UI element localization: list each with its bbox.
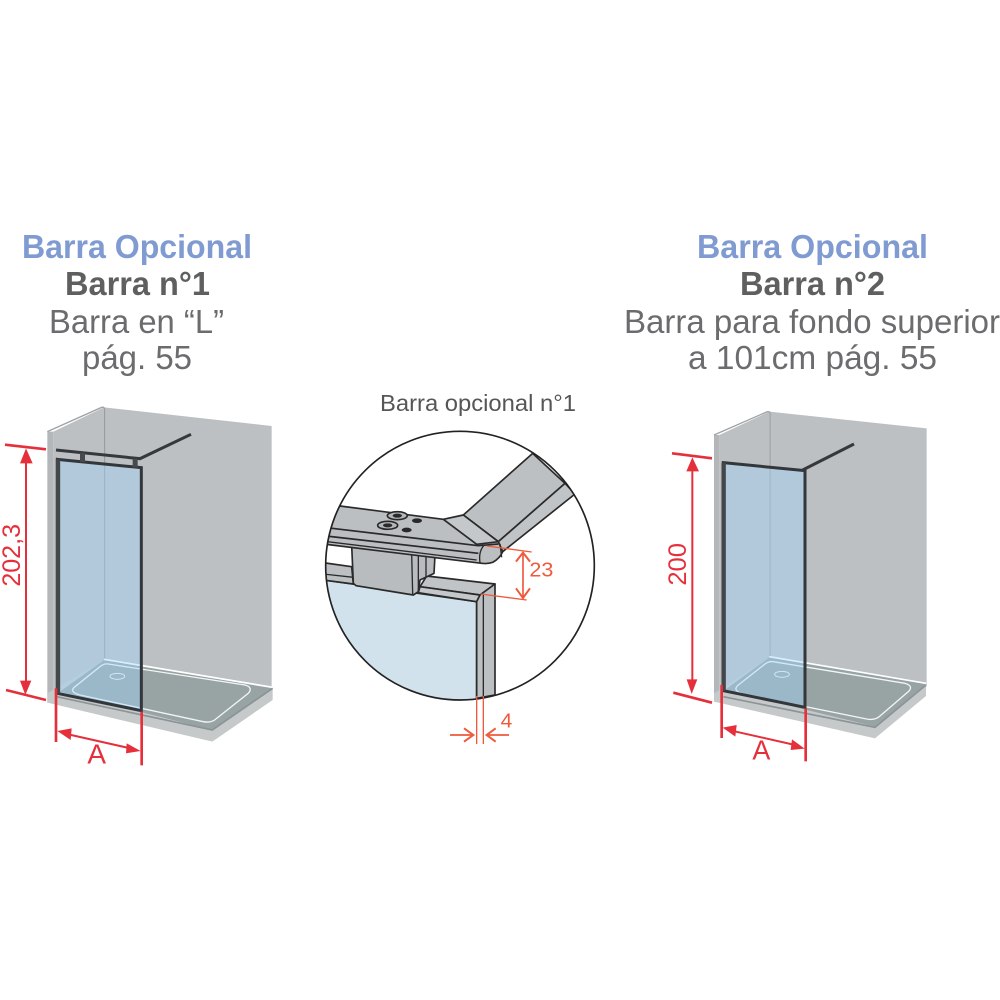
- dimension: 4: [450, 696, 512, 744]
- glass frame: [57, 459, 141, 711]
- heading: left column: Barra n°1: [65, 265, 210, 302]
- heading: right column: Barra Opcional: [697, 228, 928, 265]
- dimension: width A: [722, 685, 806, 765]
- dimension: height: 200: [664, 543, 692, 586]
- dimension: width A: A: [87, 738, 107, 769]
- heading: right column: Barra n°2: [740, 265, 885, 302]
- dimension: 23: [481, 546, 553, 600]
- heading: right column: Barra para fondo superior: [624, 303, 1000, 340]
- frame rail behind bracket: [323, 563, 353, 584]
- glass panel: [723, 463, 805, 707]
- heading: left column: Barra en “L”: [49, 303, 224, 340]
- caption: detail view: Barra opcional n°1: [380, 390, 576, 416]
- bolts: [378, 512, 422, 532]
- dimension: height: [0, 445, 46, 700]
- glass frame: [723, 463, 805, 707]
- heading: left column: [22, 228, 252, 376]
- dimension: 4: 4: [501, 709, 512, 732]
- heading: left column: Barra Opcional: [22, 228, 252, 265]
- detail artwork clipped to circle: [323, 453, 575, 703]
- dimension: height: [664, 453, 712, 703]
- diagram: detail circle: [323, 431, 594, 744]
- heading: left column: pág. 55: [82, 339, 192, 376]
- shower tray and floor: [47, 659, 273, 742]
- L bar: [56, 434, 191, 467]
- walls: [714, 412, 927, 702]
- bracket: [352, 545, 435, 595]
- bar: [323, 506, 503, 564]
- arm: [463, 453, 565, 542]
- diagram: shower with bar 2: [664, 412, 927, 765]
- support bar: [803, 444, 854, 470]
- walls: [47, 407, 272, 703]
- left profile: [51, 459, 64, 693]
- glass: [323, 580, 477, 703]
- frame top: [420, 576, 495, 595]
- dimension: 23: 23: [529, 559, 553, 582]
- heading: right column: a 101cm pág. 55: [688, 339, 937, 376]
- dimension: width A: [56, 688, 142, 769]
- shower tray and floor: [714, 657, 926, 738]
- diagram: shower with bar 1: [0, 407, 273, 769]
- heading: right column: [624, 228, 1000, 376]
- glass panel: [57, 459, 141, 711]
- frame vertical: [477, 584, 495, 698]
- circle outline: [326, 431, 594, 700]
- left profile: [717, 463, 730, 691]
- dimension: width A: A: [752, 734, 771, 765]
